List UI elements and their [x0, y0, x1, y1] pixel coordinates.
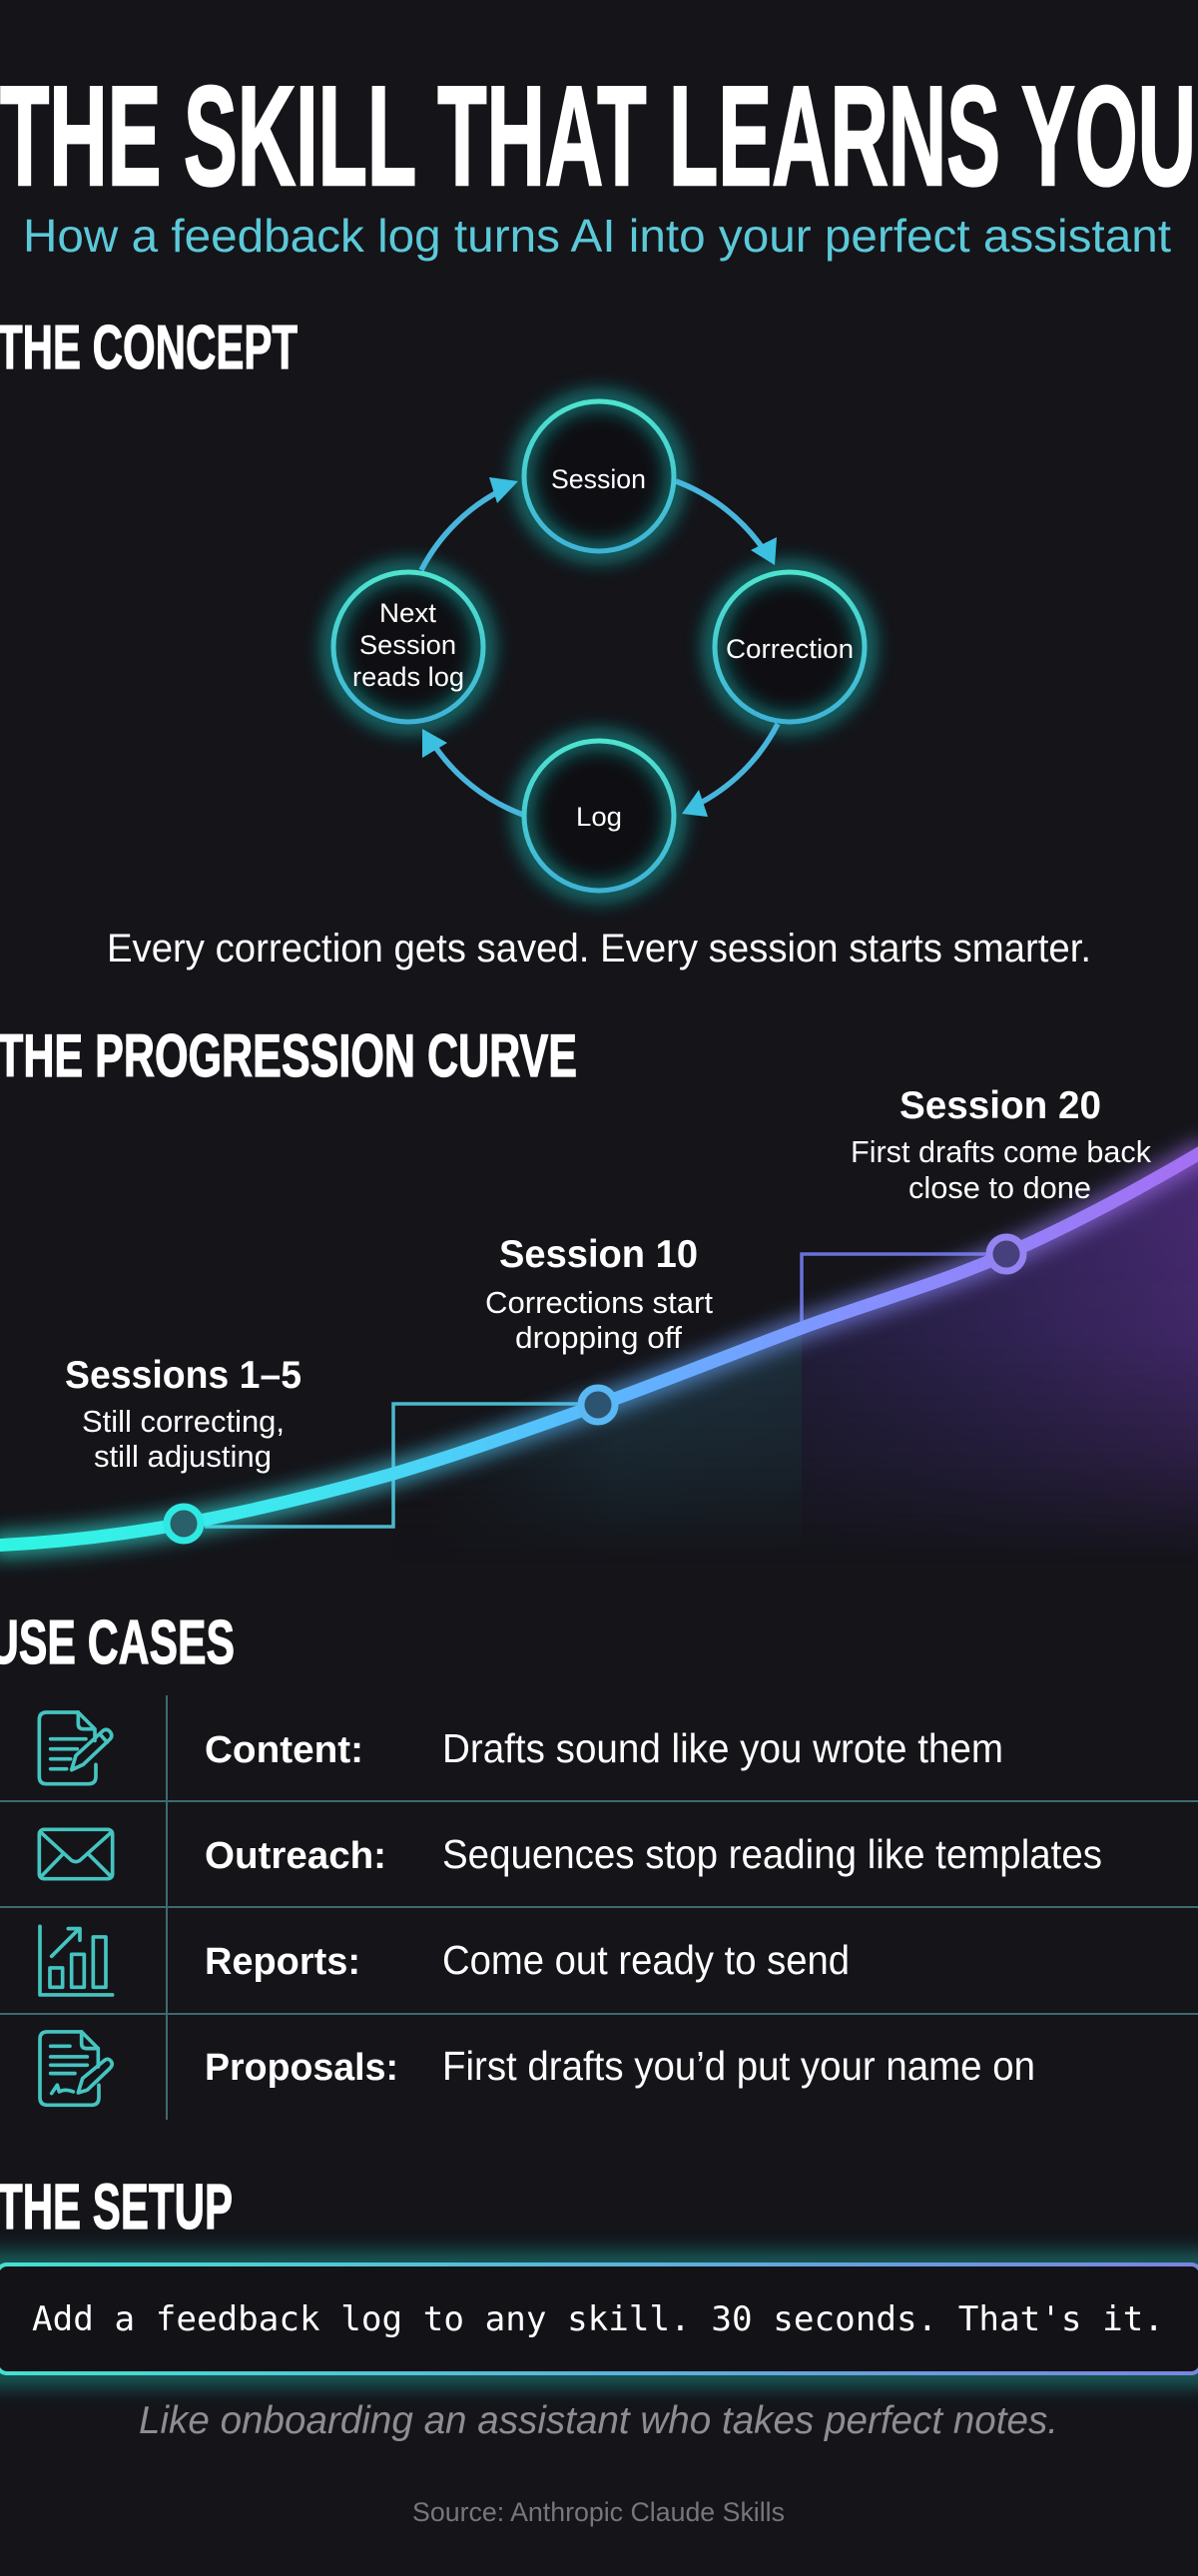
row: reports	[205, 1937, 850, 1983]
arrow: session to correction	[676, 481, 777, 565]
label: session 10: Corrections start	[485, 1285, 713, 1320]
icon: envelope	[39, 1829, 113, 1879]
row: proposals: First drafts you’d put your name on	[442, 2043, 1035, 2089]
source: Source: Anthropic Claude Skills	[412, 2497, 785, 2527]
node: next session reads log	[333, 572, 483, 722]
point: session 20	[989, 1237, 1023, 1271]
tagline: Every correction gets saved. Every session starts smarter.	[107, 927, 1091, 970]
row: outreach: Outreach:	[205, 1835, 386, 1877]
icon: bar chart with arrow	[40, 1926, 113, 1995]
panel: setup callout	[0, 2264, 1198, 2373]
point: session 10	[581, 1388, 615, 1422]
subtitle: How a feedback log turns AI into your perfect assistant	[23, 210, 1171, 262]
label: session 10	[485, 1233, 713, 1355]
icon: document with pencil	[39, 1712, 112, 1784]
node: log	[524, 741, 674, 891]
heading: the setup: THE SETUP	[0, 2171, 233, 2243]
point: sessions 1-5	[167, 1507, 201, 1541]
heading: the concept: THE CONCEPT	[0, 314, 298, 382]
ring glow	[331, 399, 867, 893]
row: proposals: Proposals:	[205, 2047, 398, 2089]
label: sessions 1-5	[65, 1354, 301, 1474]
progression curve line	[0, 1148, 1198, 1546]
node: log: Log	[576, 802, 622, 832]
node: correction: Correction	[726, 634, 854, 664]
panel: feedback loop diagram	[331, 399, 867, 893]
node: session	[524, 401, 674, 551]
row: reports: Reports:	[205, 1941, 360, 1983]
row: content: Drafts sound like you wrote them	[442, 1725, 1003, 1771]
node: session: Session	[551, 464, 646, 494]
row: content: Content:	[205, 1729, 363, 1771]
panel: progression curve chart	[0, 1084, 1198, 1568]
label: session 20	[851, 1084, 1151, 1205]
panel: use cases table	[0, 1695, 1198, 2120]
curve glow	[0, 1148, 1198, 1546]
closing note: Like onboarding an assistant who takes perfect notes.	[139, 2399, 1058, 2442]
arrow: correction to log	[682, 724, 778, 817]
label: sessions 1-5: still adjusting	[94, 1439, 272, 1474]
row: content	[205, 1725, 1003, 1771]
row: reports: Come out ready to send	[442, 1937, 850, 1983]
step connector lines	[205, 1254, 988, 1527]
panel: setup callout: Add a feedback log to any skill. 30 seconds. That's it.	[32, 2299, 1164, 2339]
label: session 20: First drafts come back	[851, 1134, 1151, 1169]
area under curve: teal	[393, 1328, 802, 1568]
arrow: next session to session	[421, 477, 518, 570]
area under curve: purple	[802, 1148, 1198, 1568]
label: session 10: Session 10	[499, 1233, 698, 1276]
label: session 20: Session 20	[899, 1084, 1101, 1127]
row: proposals	[205, 2043, 1035, 2089]
row: outreach: Sequences stop reading like templates	[442, 1831, 1102, 1877]
icon: proposal with signature	[40, 2032, 112, 2105]
heading: the progression curve: THE PROGRESSION CURVE	[0, 1022, 577, 1089]
label: session 10: dropping off	[515, 1320, 682, 1355]
node: next session reads log: Session	[359, 630, 456, 660]
node: next session reads log: Next	[379, 598, 436, 628]
arrow: log to next session	[422, 729, 523, 815]
label: sessions 1-5: Sessions 1–5	[65, 1354, 301, 1397]
node: correction	[715, 572, 865, 722]
node fills	[332, 400, 866, 892]
node: next session reads log: reads log	[352, 662, 464, 692]
label: session 20: close to done	[908, 1170, 1091, 1205]
label: sessions 1-5: Still correcting,	[82, 1404, 285, 1439]
